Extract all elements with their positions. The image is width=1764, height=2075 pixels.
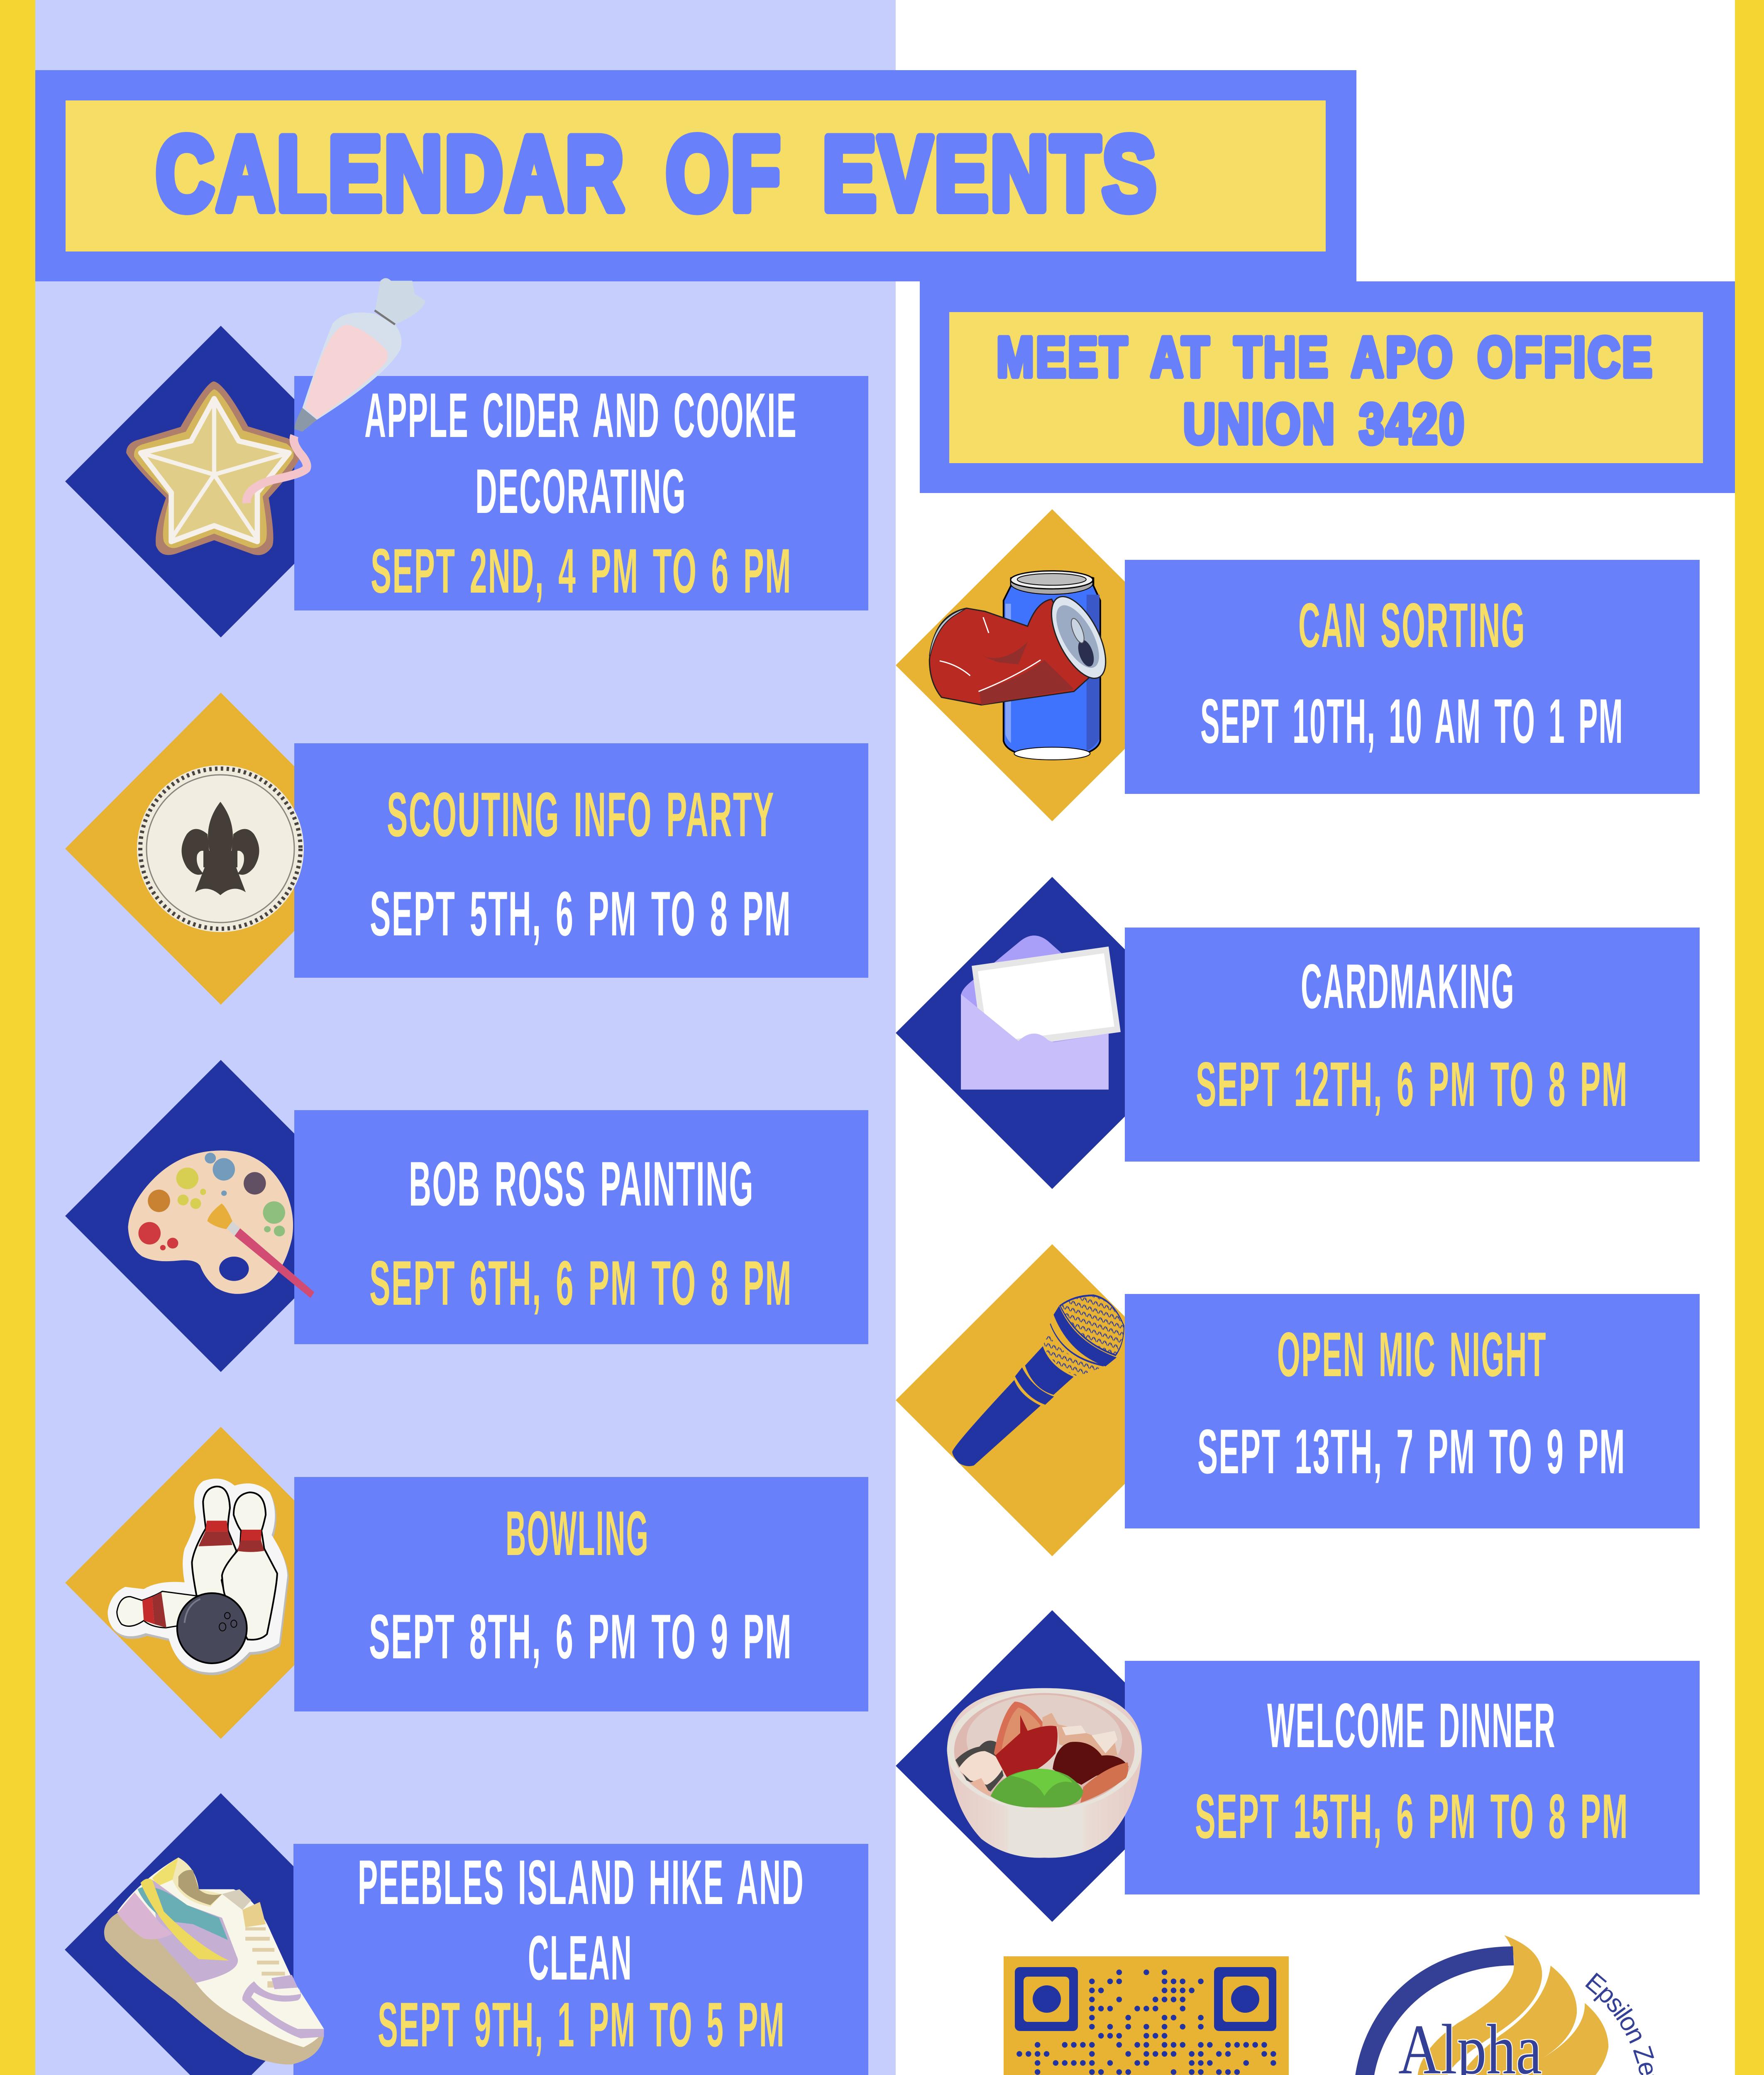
icon: torch flames and ring — [1354, 1935, 1608, 2075]
panel: bowling event: SEPT 8TH, 6 PM TO 9 PM — [369, 1601, 792, 1672]
title: CALENDAR OF EVENTS — [156, 115, 1158, 232]
logo: Alpha Phi Omega Epsilon Zeta Chapter — [1354, 1935, 1666, 2075]
icon: soda cans — [929, 571, 1110, 760]
diamond — [65, 1793, 376, 2075]
event card — [294, 1110, 868, 1344]
event card — [1125, 1294, 1700, 1528]
panel: bowling event: BOWLING — [506, 1498, 649, 1569]
location line two: UNION 3420 — [1183, 392, 1466, 455]
event card — [294, 1477, 868, 1711]
icon: star cookie and piping bag — [126, 278, 425, 555]
panel: can sorting event: CAN SORTING — [1298, 590, 1526, 661]
right yellow border — [1735, 0, 1764, 2075]
panel: painting event: SEPT 6TH, 6 PM TO 8 PM — [369, 1248, 792, 1318]
event card — [1125, 928, 1700, 1162]
panel: bowling event — [65, 1427, 868, 1739]
diamond — [65, 326, 376, 637]
diamond — [65, 1427, 376, 1739]
event name — [358, 1847, 804, 1993]
diamond — [896, 1610, 1209, 1922]
panel: scouting event: SEPT 5TH, 6 PM TO 8 PM — [370, 879, 792, 949]
panel: painting event — [65, 1060, 868, 1372]
event card — [293, 1844, 868, 2075]
QR code — [1004, 1956, 1289, 2075]
diamond — [896, 877, 1209, 1189]
panel: open mic event — [896, 1244, 1700, 1556]
icon: bowling pins and ball — [108, 1479, 289, 1675]
panel: hike event: PEEBLES ISLAND HIKE AND — [358, 1847, 804, 1918]
panel: cookie decorating event: APPLE CIDER AND COOKIE — [364, 380, 797, 451]
panel: can sorting event — [896, 509, 1700, 821]
panel: cardmaking event — [896, 877, 1700, 1189]
panel: hike event — [65, 1793, 868, 2075]
lavender left column — [35, 0, 896, 2075]
event name: CLEAN — [528, 1923, 633, 1993]
event card — [1125, 1661, 1700, 1894]
panel: painting event: BOB ROSS PAINTING — [409, 1149, 754, 1219]
panel: cookie decorating event: SEPT 2ND, 4 PM TO 6 PM — [371, 536, 792, 606]
event card — [294, 743, 868, 978]
panel: meeting location — [920, 281, 1735, 493]
left yellow border — [0, 0, 35, 2075]
panel: cookie decorating event — [65, 278, 868, 637]
panel: scouting event — [65, 693, 868, 1005]
event name — [364, 380, 797, 527]
panel: hike event: SEPT 9TH, 1 PM TO 5 PM — [378, 1990, 785, 2060]
icon: envelope and card — [961, 935, 1121, 1089]
diamond — [65, 1060, 376, 1372]
icon: food bowl — [947, 1688, 1142, 1858]
panel: cardmaking event: CARDMAKING — [1301, 951, 1515, 1022]
icon: sneaker — [104, 1858, 324, 2065]
event card — [1125, 560, 1700, 794]
panel: welcome dinner event — [896, 1610, 1700, 1922]
event card — [294, 376, 868, 610]
panel: title banner — [35, 70, 1356, 281]
icon: scouting badge — [137, 765, 304, 932]
diamond — [896, 1244, 1209, 1556]
event name: DECORATING — [475, 456, 687, 527]
diamond — [65, 693, 376, 1005]
diamond — [896, 509, 1209, 821]
panel: scouting event: SCOUTING INFO PARTY — [387, 779, 775, 850]
icon: microphone — [952, 1295, 1124, 1466]
icon: paint palette — [128, 1150, 314, 1298]
